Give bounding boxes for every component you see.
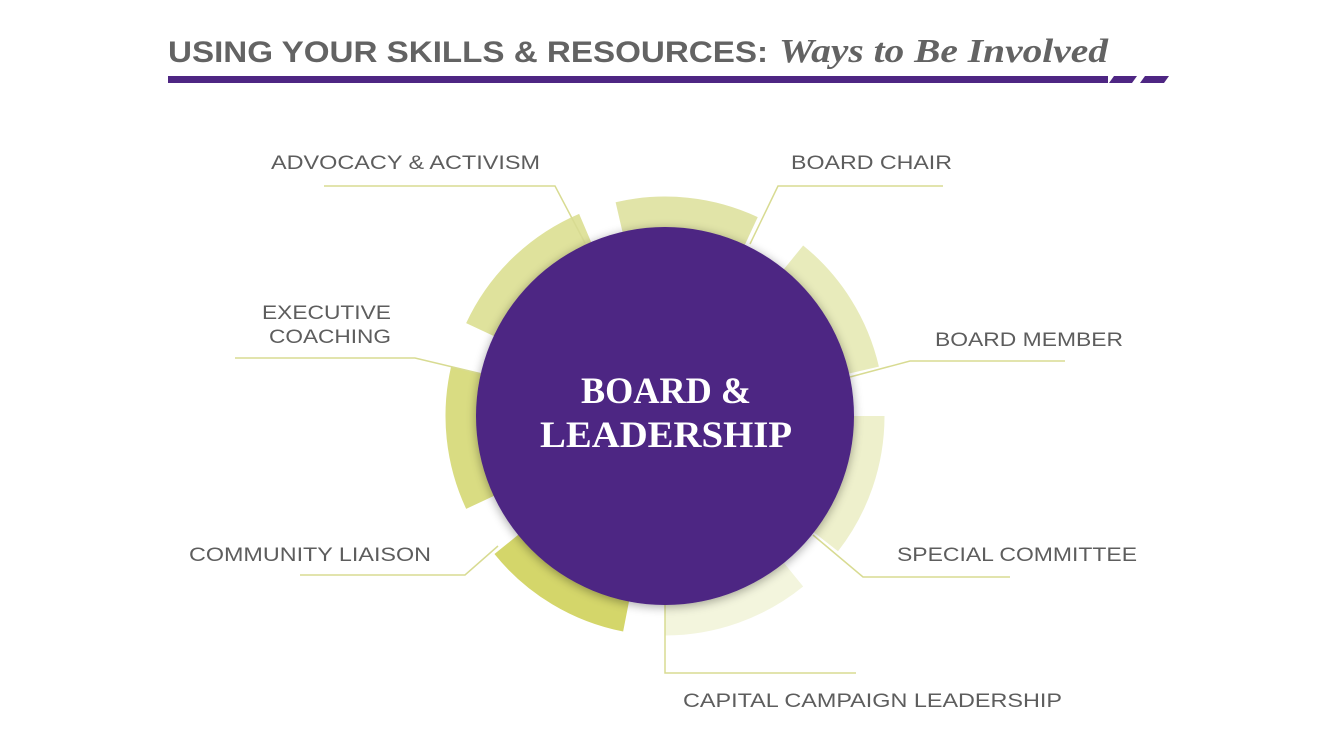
label: advocacy: ADVOCACY & ACTIVISM bbox=[271, 153, 540, 174]
arc: special committee bbox=[826, 416, 869, 542]
labels bbox=[189, 153, 1137, 712]
center circle bbox=[476, 227, 854, 605]
center text: BOARD & bbox=[581, 371, 751, 412]
title: USING YOUR SKILLS & RESOURCES: bbox=[168, 36, 768, 69]
arc: advocacy bbox=[480, 228, 585, 330]
label: executive coaching bbox=[262, 303, 391, 348]
title underline bar bbox=[168, 76, 1169, 83]
center text bbox=[540, 371, 792, 456]
title bbox=[168, 33, 1109, 70]
ring segments bbox=[461, 212, 869, 620]
label: special committee: SPECIAL COMMITTEE bbox=[897, 545, 1137, 566]
title: Ways to Be Involved bbox=[779, 33, 1109, 70]
label: executive coaching: COACHING bbox=[269, 327, 391, 348]
label: community liaison: COMMUNITY LIAISON bbox=[189, 545, 431, 566]
label: board chair: BOARD CHAIR bbox=[791, 153, 952, 174]
arc: capital campaign bbox=[665, 574, 793, 620]
arc: board member bbox=[793, 258, 864, 370]
label: board member: BOARD MEMBER bbox=[935, 330, 1123, 351]
label: executive coaching: EXECUTIVE bbox=[262, 303, 391, 324]
label: capital campaign leadership: CAPITAL CAMPAIGN LEADERSHIP bbox=[683, 691, 1062, 712]
arc: board chair bbox=[619, 212, 751, 231]
center text: LEADERSHIP bbox=[540, 415, 792, 456]
arc: community liaison bbox=[506, 544, 626, 616]
arc: executive coaching bbox=[461, 370, 480, 502]
leader lines bbox=[235, 186, 1065, 673]
